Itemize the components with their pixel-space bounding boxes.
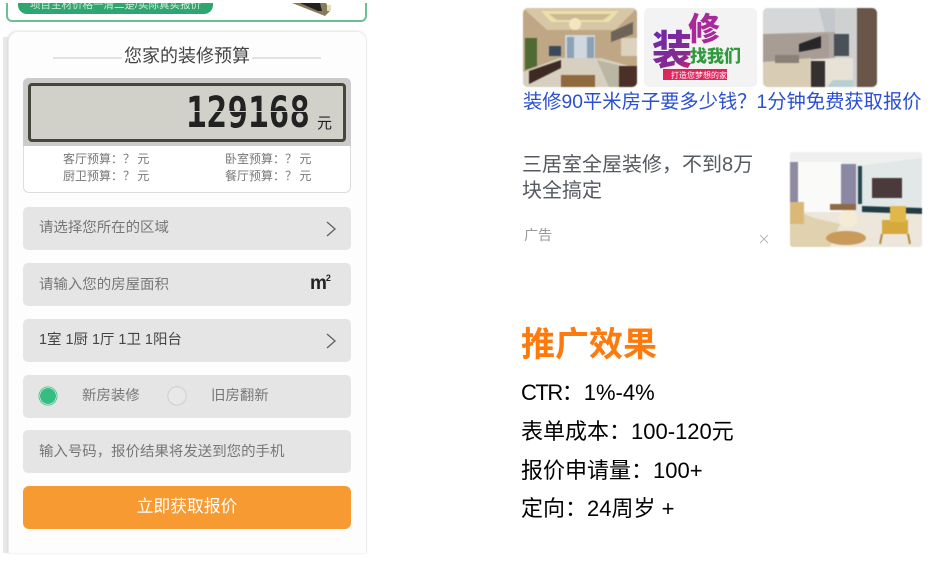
area placeholder: 请输入您的房屋面积	[39, 277, 169, 293]
panel: top green banner fragment	[6, 0, 367, 22]
panel: ad one images	[522, 7, 878, 88]
field: region select	[23, 207, 351, 250]
icon: close	[760, 234, 768, 244]
image: renovation promo: 修	[688, 11, 720, 47]
stat: targeting: 定向：24周岁 +	[521, 491, 674, 523]
stat: quote applications: 报价申请量：100+	[521, 453, 703, 485]
title rule left	[53, 57, 122, 59]
stat: CTR: CTR：1%-4%	[521, 375, 655, 407]
image: renovation promo: 找我们	[690, 46, 741, 66]
button: get quote	[23, 486, 351, 529]
field: area input	[23, 263, 351, 306]
icon: selected radio	[38, 386, 58, 406]
new house option: 新房装修	[82, 388, 140, 404]
banner image fragment	[292, 3, 331, 16]
button: get quote: 立即获取报价	[137, 497, 237, 516]
image: renovation promo: 打造您梦想的家	[671, 70, 727, 80]
image: renovation promo	[644, 8, 757, 87]
card body	[8, 31, 367, 553]
LCD display	[28, 83, 346, 142]
region placeholder: 请选择您所在的区域	[39, 220, 169, 236]
heading: promotion results: 推广效果	[521, 326, 657, 364]
bedroom budget: 卧室预算：？ 元	[225, 150, 311, 167]
icon: chevron	[326, 334, 336, 348]
field: room layout select	[23, 319, 351, 362]
ad two headline: 三居室全屋装修，不到8万块全搞定	[522, 154, 753, 202]
top page clip strip	[0, 0, 375, 3]
panel: ad two	[522, 152, 923, 248]
kitchen budget: 厨卫预算：？ 元	[63, 167, 149, 184]
layout value: 1室 1厨 1厅 1卫 1阳台	[39, 332, 182, 348]
banner pill	[18, 0, 213, 14]
image: kitchen	[762, 7, 878, 88]
phone placeholder: 输入号码，报价结果将发送到您的手机	[39, 444, 284, 460]
ad label: 广告	[524, 227, 552, 243]
living room budget: 客厅预算：？ 元	[63, 150, 149, 167]
icon: chevron	[326, 222, 336, 236]
icon: square metre unit: m2	[310, 273, 331, 294]
icon: empty radio	[168, 386, 186, 406]
ad one headline: 装修90平米房子要多少钱？1分钟免费获取报价	[523, 86, 922, 114]
title text: 您家的装修预算	[124, 46, 250, 66]
dining budget: 餐厅预算：？ 元	[225, 167, 311, 184]
old house option: 旧房翻新	[211, 388, 269, 404]
title rule right	[252, 57, 321, 59]
panel: budget calculator card	[3, 30, 367, 554]
image: bright living room	[789, 152, 923, 248]
LCD surround	[23, 78, 351, 146]
image: living room	[522, 8, 638, 88]
panel: budget result box	[23, 78, 351, 193]
field: phone input	[23, 430, 351, 473]
card shadow edge	[3, 37, 8, 553]
field: renovation type	[23, 375, 351, 418]
stat: form cost: 表单成本：100-120元	[521, 414, 734, 446]
image: renovation promo: 装	[652, 29, 692, 73]
LCD unit: 元	[317, 115, 332, 132]
